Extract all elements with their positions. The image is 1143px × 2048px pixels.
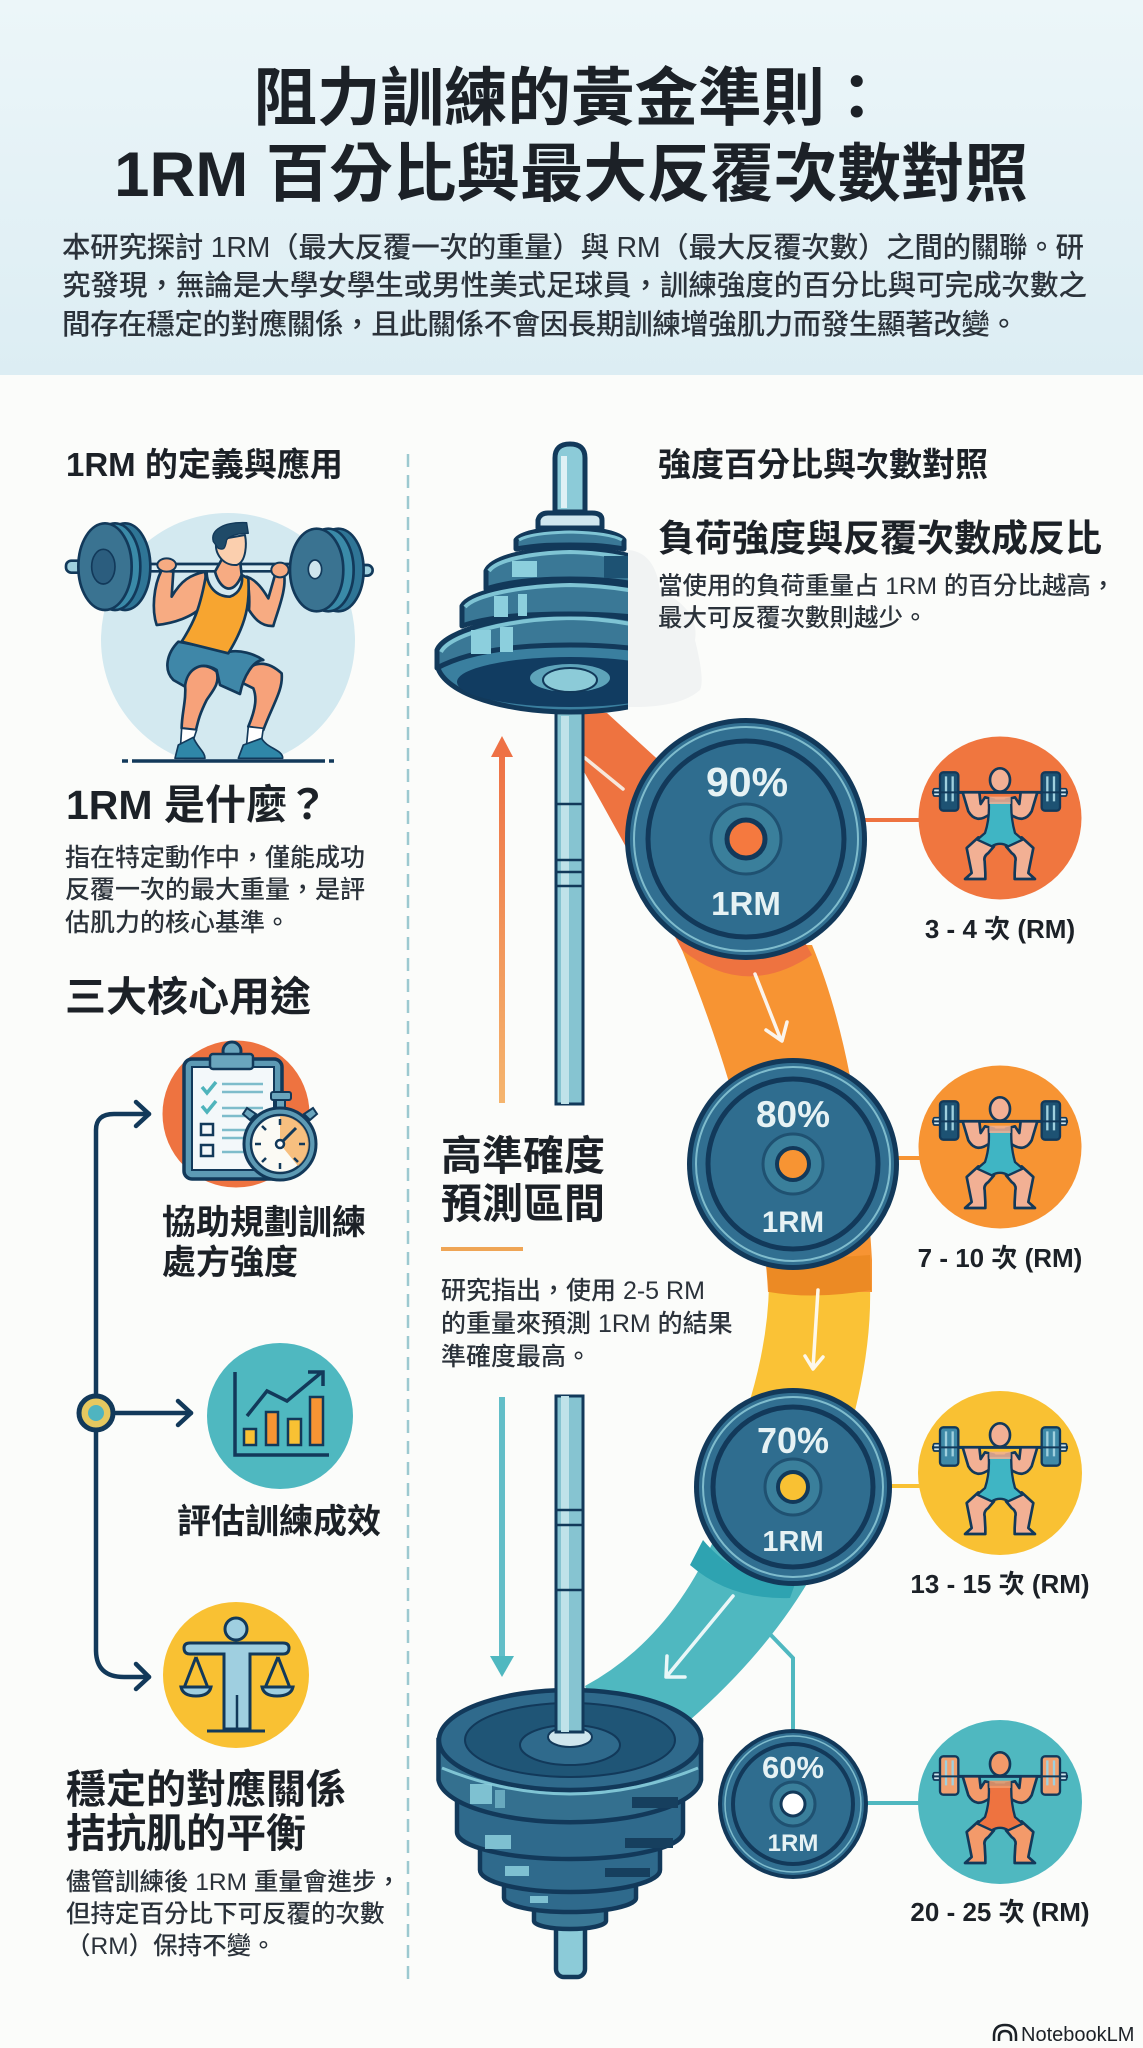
text: 1RM definition [65,844,365,937]
plate: 60% [718,1729,868,1879]
text: inverse relation body: 最大可反覆次數則越少。 [658,604,928,632]
barbell shaft [556,690,583,1104]
heading: stable relationship: 拮抗肌的平衡 [66,1812,306,1856]
heading: high accuracy range: 高準確度 [441,1133,605,1179]
icon: chart [207,1343,353,1489]
label: 70% reps: 13 - 15 次 (RM) [910,1569,1090,1599]
text: accuracy body: 研究指出，使用 2-5 RM [441,1277,705,1305]
connector: branching arrows [79,1102,191,1689]
text: inverse relation body [658,572,1115,632]
text: 1RM definition: 反覆一次的最大重量，是評 [65,876,365,904]
connector [860,818,920,822]
bottom weight stack [438,1396,701,1977]
arrow: yellow to teal [666,1596,733,1677]
text: 1RM definition: 指在特定動作中，僅能成功 [65,844,365,872]
arrow: up (orange) [491,736,513,1103]
plate: 90% [625,718,867,960]
text: use 1: 協助規劃訓練 [162,1204,366,1242]
plate: 70%: 1RM [762,1526,824,1558]
connector node [79,1396,113,1430]
left column heading: 1RM 的定義與應用 [66,446,343,483]
illustration: squatting lifter [66,513,373,767]
text: stable relationship body: 儘管訓練後 1RM 重量會進步， [66,1868,401,1896]
intro text: 間存在穩定的對應關係，且此關係不會因長期訓練增強肌力而發生顯著改變。 [62,309,1018,341]
icon: clipboard and stopwatch [162,1040,317,1188]
heading: high accuracy range [441,1133,605,1227]
plate: 80%: 80% [756,1094,830,1135]
arrow: band dash [585,758,623,789]
arrow: down (teal) [490,1397,514,1677]
plate: 60%: 1RM [768,1830,818,1857]
heading: high accuracy range: 預測區間 [441,1181,605,1227]
label: 60% reps: 20 - 25 次 (RM) [910,1897,1090,1927]
plate: 90%: 90% [706,759,788,805]
title: 阻力訓練的黃金準則： [254,64,888,134]
icon: lifter on teal circle [918,1720,1082,1884]
text: use 1: 處方強度 [162,1244,298,1282]
faded ghost [628,550,702,707]
header panel [0,0,1143,375]
heading: stable relationship: 穩定的對應關係 [66,1768,346,1812]
heading: what is 1RM: 1RM 是什麼？ [66,782,328,828]
band: orange segment [680,945,872,1292]
heading: three core uses: 三大核心用途 [65,974,311,1020]
plate: 90%: 1RM [711,885,781,922]
plate: 80%: 1RM [762,1206,824,1239]
icon: balance scale figure [163,1602,309,1748]
band: teal segment [585,1535,815,1725]
row: 70% [694,1388,1090,1599]
connector [895,1156,920,1160]
plate: 80% [687,1058,899,1270]
icon: lifter on yellow circle [918,1391,1082,1555]
connector [767,1631,920,1803]
plate: 70% [694,1388,892,1586]
column divider [407,454,409,1985]
curved intensity band [583,711,872,1725]
plate: 60%: 60% [762,1750,824,1785]
row: 80% [687,1058,1082,1273]
accent line [441,1247,523,1251]
subheading: inverse relation: 負荷強度與反覆次數成反比 [658,518,1102,559]
text: 1RM definition: 估肌力的核心基準。 [65,909,290,937]
row: 60% [718,1631,1090,1927]
footer: NotebookLM brand: NotebookLM [1021,2024,1134,2046]
title [114,64,1028,210]
band: yellow segment [750,1285,870,1430]
text: stable relationship body [66,1868,401,1960]
band: red segment [583,711,812,976]
arrow: orange to yellow [805,1290,823,1369]
top weight stack [437,444,703,712]
right heading: 強度百分比與次數對照 [658,446,988,483]
row: 90% [625,718,1082,960]
text: use 1 [162,1204,366,1282]
connector [888,1484,920,1488]
intro text [62,232,1087,341]
label: 80% reps: 7 - 10 次 (RM) [918,1243,1082,1273]
title: 1RM 百分比與最大反覆次數對照 [114,140,1028,210]
text: accuracy body: 的重量來預測 1RM 的結果 [441,1310,733,1338]
plate: 70%: 70% [757,1420,829,1461]
text: use 2: 評估訓練成效 [177,1503,381,1541]
text: inverse relation body: 當使用的負荷重量占 1RM 的百分比越高， [658,572,1115,600]
text: stable relationship body: 但持定百分比下可反覆的次數 [66,1900,384,1928]
icon: lifter on orange circle [918,1066,1082,1228]
text: stable relationship body: （RM）保持不變。 [66,1932,276,1960]
icon: lifter on red circle [918,736,1082,900]
text: accuracy body: 準確度最高。 [441,1343,591,1371]
intro text: 本研究探討 1RM（最大反覆一次的重量）與 RM（最大反覆次數）之間的關聯。研 [62,232,1084,264]
intro text: 究發現，無論是大學女學生或男性美式足球員，訓練強度的百分比與可完成次數之 [62,270,1087,302]
text: accuracy body [441,1277,733,1371]
label: 90% reps: 3 - 4 次 (RM) [925,914,1075,944]
heading: stable relationship [66,1768,346,1856]
arrow: red to orange [755,974,787,1041]
